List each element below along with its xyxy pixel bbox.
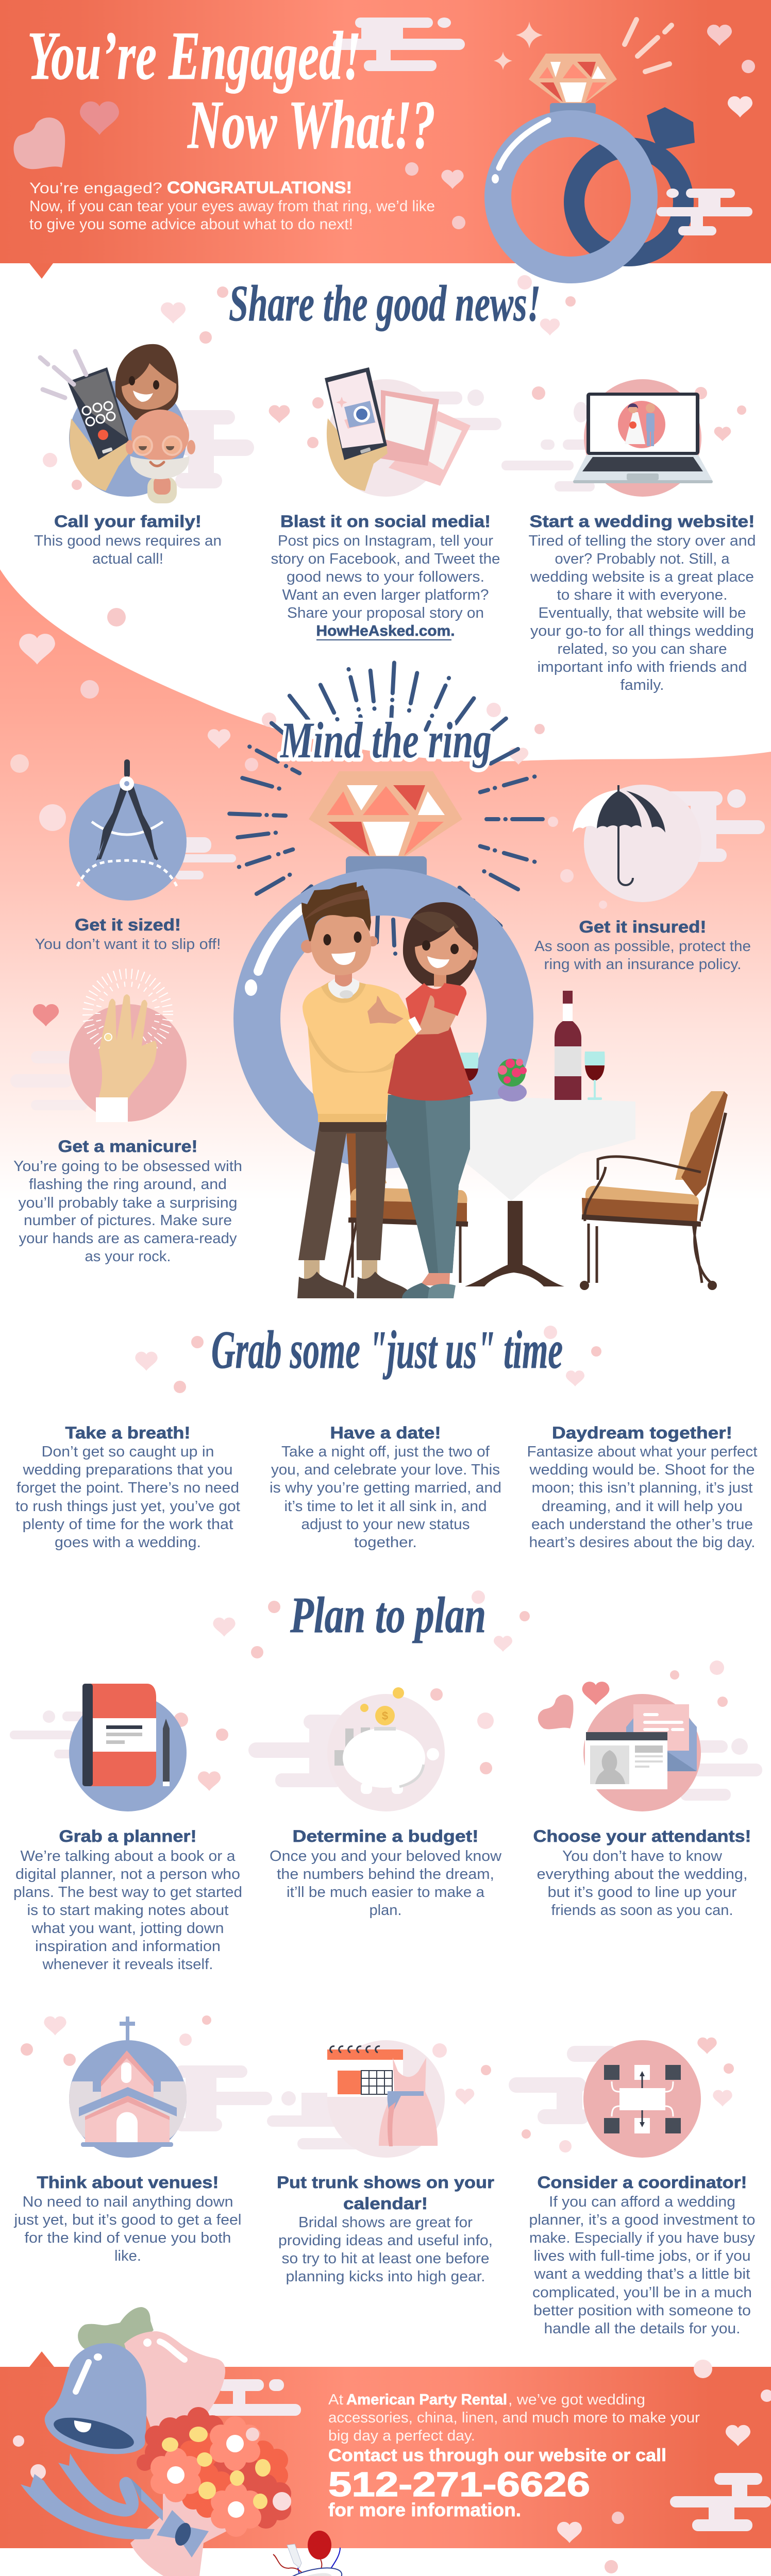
heading: Get it insured!	[579, 918, 706, 936]
body text: You don’t have to know	[562, 1848, 723, 1865]
body text: dreaming, and it will help you	[542, 1498, 743, 1515]
cloud beside ring	[657, 189, 752, 235]
woman	[386, 902, 478, 1298]
body text: related, so you can share	[558, 641, 727, 657]
intro text: to give you some advice about what to do next!	[29, 216, 353, 233]
body text: everything about the wedding,	[537, 1866, 747, 1883]
panel: put trunk shows on your calendar	[267, 2040, 494, 2285]
body text: make. Especially if you have busy	[529, 2230, 755, 2246]
icon: phone and photos	[269, 367, 501, 497]
panel: blast it on social media	[269, 367, 501, 640]
body text: Once you and your beloved know	[270, 1848, 502, 1865]
logo: American Party Rental	[273, 2531, 499, 2576]
icon: piggy bank	[248, 1687, 494, 1811]
left chair behind couple	[343, 1128, 468, 1293]
body text: important info with friends and	[537, 659, 747, 675]
decorative dots around plan heading	[213, 1590, 728, 1707]
icon: umbrella	[573, 785, 765, 902]
heading: Blast it on social media!	[280, 512, 491, 531]
body text: together.	[354, 1534, 417, 1551]
panel: determine a budget	[248, 1687, 502, 1919]
panel: call your family	[34, 344, 254, 567]
body text: Tired of telling the story over and	[529, 533, 756, 549]
body text: No need to nail anything down	[23, 2194, 233, 2210]
body text: adjust to your new status	[301, 1516, 470, 1533]
body text	[271, 533, 500, 640]
body text: planning kicks into high gear.	[286, 2268, 485, 2285]
right chair	[580, 1091, 728, 1290]
green leaf	[78, 2307, 154, 2354]
panel: grab a planner	[10, 1684, 242, 1973]
panel: get a manicure	[10, 974, 242, 1265]
table with cloth	[462, 1097, 635, 1286]
body text: but it’s good to line up your	[547, 1884, 737, 1901]
heading: Have a date!	[330, 1423, 441, 1442]
title	[27, 18, 435, 163]
body text: plenty of time for the work that	[23, 1516, 233, 1533]
icon: phone and family	[40, 344, 254, 503]
footer text	[328, 2392, 700, 2520]
body text: is to start making notes about	[27, 1902, 229, 1919]
body text: We’re talking about a book or a	[21, 1848, 236, 1865]
decorative clouds and sparkles in header	[13, 18, 755, 229]
body text: story on Facebook, and Tweet the	[271, 551, 500, 567]
icon: laptop	[501, 379, 746, 497]
footer text: accessories, china, linen, and much more to make your	[328, 2410, 700, 2426]
body text: it’ll be much easier to make a	[287, 1884, 485, 1901]
panel: consider a coordinator	[509, 2038, 756, 2337]
footer text: big day a perfect day.	[328, 2428, 475, 2444]
icon: planner book	[10, 1684, 228, 1811]
flower vase	[498, 1059, 527, 1101]
man	[297, 882, 417, 1298]
title: Now What!?	[187, 87, 435, 163]
body text: plans. The best way to get started	[13, 1884, 242, 1901]
decorative hearts and dots in ring section	[10, 608, 607, 909]
heading: Take a breath!	[65, 1423, 191, 1442]
footer text: American Party Rental	[346, 2392, 507, 2408]
body text: handle all the details for you.	[544, 2320, 740, 2337]
heading: mind the ring: Mind the ring	[280, 711, 492, 769]
footer text: for more information.	[328, 2499, 521, 2520]
body text: Take a night off, just the two of	[281, 1444, 490, 1460]
heading: share the good news: Share the good news!	[229, 275, 541, 332]
body text	[13, 1158, 242, 1265]
panel: think about venues	[13, 2015, 272, 2264]
body text: You don’t want it to slip off!	[35, 936, 221, 953]
illustration: happy couple	[297, 882, 478, 1298]
body text: Fantasize about what your perfect	[527, 1444, 758, 1460]
panel: have a date	[270, 1423, 501, 1551]
body text: flashing the ring around, and	[29, 1176, 227, 1193]
heading	[277, 2173, 494, 2213]
body text	[34, 533, 222, 567]
dark ring	[574, 107, 695, 256]
body text: As soon as possible, protect the	[534, 938, 751, 955]
body text: You’re going to be obsessed with	[13, 1158, 242, 1175]
header banner	[0, 0, 771, 279]
diamond	[309, 771, 462, 856]
illustration: dinner table	[460, 991, 728, 1290]
body text: it’s time to let it all sink in, and	[284, 1498, 487, 1515]
icon: calendar and dress	[267, 2040, 491, 2158]
body text: better position with someone to	[533, 2302, 751, 2319]
diamond	[529, 54, 617, 103]
body text: family.	[621, 677, 664, 693]
body text: to share it with everyone.	[557, 587, 728, 603]
icon: wedding bells and bouquet	[21, 2307, 291, 2576]
body text: good news to your followers.	[287, 569, 484, 585]
body text: over? Probably not. Still, a	[555, 551, 730, 567]
body text: the numbers behind the dream,	[277, 1866, 494, 1883]
body text: to rush things just yet, you’ve got	[15, 1498, 240, 1515]
body text: actual call!	[92, 551, 163, 567]
wine bottle and glasses	[460, 991, 605, 1100]
decorative clouds and hearts in footer	[13, 2360, 771, 2573]
body text: wedding website is a great place	[530, 569, 754, 585]
flowers	[137, 2407, 291, 2537]
main blue ring	[492, 103, 644, 270]
decorative dots around share heading	[161, 275, 576, 344]
panel: start a wedding website	[501, 379, 756, 693]
icon: seating chart	[509, 2038, 734, 2158]
panel: choose your attendants	[533, 1682, 762, 1919]
body text: HowHeAsked.com.	[316, 623, 455, 639]
body text: Eventually, that website will be	[538, 605, 746, 621]
body text: friends as soon as you can.	[551, 1902, 733, 1919]
heading: Put trunk shows on your	[277, 2173, 494, 2192]
icon: invitation and card	[538, 1682, 762, 1811]
body text: your go-to for all things wedding	[530, 623, 754, 639]
body text: inspiration and information	[35, 1938, 221, 1955]
blue bell	[45, 2343, 146, 2455]
body text: forget the point. There’s no need	[16, 1480, 239, 1496]
body text	[527, 1444, 758, 1551]
heading: Think about venues!	[37, 2173, 219, 2192]
ring band	[245, 856, 510, 1145]
heading: Call your family!	[54, 512, 202, 531]
heading: Get it sized!	[75, 916, 181, 934]
heading: Grab a planner!	[59, 1827, 197, 1845]
icon: hand with ring	[10, 974, 187, 1122]
body text: If you can afford a wedding	[549, 2194, 735, 2210]
intro text	[29, 178, 435, 233]
body text	[13, 2194, 241, 2264]
body text: This good news requires an	[34, 533, 222, 549]
heading: grab some just us time: Grab some "just us" time	[211, 1319, 563, 1380]
body text: planner, it’s a good investment to	[529, 2212, 756, 2228]
body text: digital planner, not a person who	[15, 1866, 240, 1883]
burst rays around diamond	[229, 663, 543, 956]
body text: plan.	[369, 1902, 402, 1919]
body text: as your rock.	[85, 1248, 171, 1265]
body text	[270, 1848, 502, 1919]
body text	[13, 1848, 242, 1973]
body text: like.	[114, 2248, 141, 2264]
body text: so try to hit at least one before	[281, 2250, 490, 2267]
footer text: 512-271-6626	[328, 2465, 590, 2504]
footer text: At	[328, 2392, 343, 2408]
heading: Consider a coordinator!	[537, 2173, 747, 2192]
panel: get it sized	[35, 759, 236, 953]
logo icon: hat and balloon	[273, 2531, 345, 2576]
pink bell and wrap	[124, 2331, 234, 2576]
body text: your hands are as camera-ready	[19, 1230, 237, 1247]
panel: daydream together	[527, 1423, 758, 1551]
body text: whenever it reveals itself.	[42, 1956, 213, 1973]
body text: ring with an insurance policy.	[544, 956, 741, 973]
body text: complicated, you’ll be in a much	[532, 2284, 752, 2301]
body text	[537, 1848, 747, 1919]
background: salmon wave	[0, 569, 771, 1236]
footer text: , we’ve got wedding	[508, 2392, 645, 2408]
heading: Determine a budget!	[293, 1827, 478, 1845]
heading: Choose your attendants!	[533, 1827, 751, 1845]
title: You’re Engaged!	[27, 18, 361, 94]
icon: engagement rings	[492, 54, 752, 270]
body text: for the kind of venue you both	[25, 2230, 231, 2246]
panel: take a breath	[15, 1423, 240, 1551]
hands with thumbs up	[367, 995, 456, 1035]
icon: large diamond ring	[245, 771, 510, 1145]
body text: Don’t get so caught up in	[41, 1444, 214, 1460]
body text	[529, 2194, 756, 2337]
body text: Bridal shows are great for	[298, 2214, 473, 2231]
body text: wedding would be. Shoot for the	[529, 1462, 755, 1478]
body text: just yet, but it’s good to get a feel	[13, 2212, 241, 2228]
body text: lives with full-time jobs, or if you	[534, 2248, 750, 2264]
body text: goes with a wedding.	[55, 1534, 201, 1551]
panel: get it insured	[534, 785, 765, 973]
heading: calendar!	[343, 2194, 428, 2213]
icon: compass	[39, 759, 236, 901]
body text: Want an even larger platform?	[282, 587, 489, 603]
heading: Start a wedding website!	[530, 512, 755, 531]
footer banner	[0, 2351, 771, 2548]
heading: Daydream together!	[552, 1423, 732, 1442]
body text: you, and celebrate your love. This	[271, 1462, 500, 1478]
body text: heart’s desires about the big day.	[529, 1534, 756, 1551]
decorative dots around just-us heading	[135, 1326, 601, 1393]
body text	[529, 533, 756, 693]
body text	[278, 2214, 493, 2285]
body text: each understand the other’s true	[531, 1516, 753, 1533]
body text	[534, 938, 751, 973]
body text: you’ll probably take a surprising	[19, 1195, 238, 1211]
body text: Share your proposal story on	[287, 605, 484, 621]
footer text: Contact us through our website or call	[328, 2446, 666, 2465]
body text: what you want, jotting down	[31, 1920, 224, 1937]
body text: number of pictures. Make sure	[24, 1212, 232, 1229]
ribbon and bow	[21, 2453, 209, 2557]
heading: Get a manicure!	[58, 1137, 198, 1156]
intro text: You’re engaged?	[29, 180, 162, 197]
body text: providing ideas and useful info,	[278, 2232, 493, 2249]
heading: plan to plan: Plan to plan	[290, 1586, 486, 1643]
body text: Post pics on Instagram, tell your	[278, 533, 493, 549]
icon: piggy bank: $	[382, 1709, 388, 1722]
body text: is why you’re getting married, and	[270, 1480, 501, 1496]
body text	[15, 1444, 240, 1551]
icon: church	[21, 2015, 272, 2158]
decorative dot over ribbon	[246, 2427, 260, 2442]
body text: want a wedding that’s a little bit	[533, 2266, 750, 2282]
intro text: CONGRATULATIONS!	[167, 178, 352, 197]
body text: moon; this isn’t planning, it’s just	[532, 1480, 752, 1496]
intro text: Now, if you can tear your eyes away from that ring, we’d like	[29, 198, 435, 215]
body text: wedding preparations that you	[22, 1462, 232, 1478]
body text	[270, 1444, 501, 1551]
